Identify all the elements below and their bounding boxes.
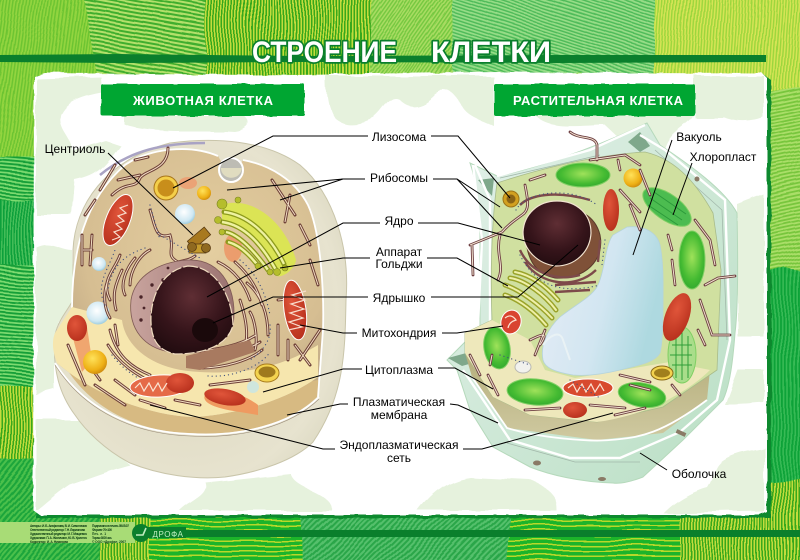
labels: [45, 130, 757, 481]
labels: Ядро: [384, 214, 414, 228]
mitochondria: [67, 190, 310, 415]
Golgi apparatus: [505, 272, 558, 325]
labels: Гольджи: [375, 257, 423, 271]
endoplasmic reticulum: [68, 148, 320, 408]
lysosome: [154, 176, 178, 200]
rough ER cut in front of nucleus: [186, 340, 255, 370]
publisher logo: ДРОФА: [152, 530, 184, 539]
labels: Аппарат: [376, 245, 423, 259]
plant cell illustration: [447, 123, 738, 483]
labels: Вакуоль: [676, 130, 722, 144]
heading: animal cell: ЖИВОТНАЯ КЛЕТКА: [132, 93, 274, 108]
imprint box: Ответственный редактор: Г. Н. Ларионова: [30, 528, 85, 532]
vacuole: [542, 227, 663, 375]
labels: Митохондрия: [362, 326, 436, 340]
nucleus interior with nucleolus: [151, 266, 233, 354]
imprint box: Подписано в печать 05.05.07: [92, 524, 129, 528]
animal cell illustration: [53, 140, 347, 478]
wall junction wedges: [448, 132, 650, 366]
red organelles: [563, 189, 697, 418]
cytoplasm: [465, 152, 721, 422]
publisher logo: [132, 524, 186, 542]
imprint box: Формат 70×100: [92, 528, 112, 532]
wall white double lines: [463, 125, 730, 458]
imprint box: [0, 522, 135, 544]
labels: Эндоплазматическая: [340, 438, 458, 452]
leader lines: [108, 136, 692, 470]
heading: animal cell: [101, 84, 305, 116]
dome of cytoplasm: [70, 149, 323, 400]
endoplasmic reticulum: [470, 132, 735, 415]
yellow bodies and lysosomes: [503, 168, 673, 380]
labels: Хлоропласт: [690, 150, 757, 164]
plasma membrane line: [72, 149, 323, 397]
title: КЛЕТКИ: [431, 36, 551, 69]
nuclear envelope: [131, 260, 234, 353]
labels: Цитоплазма: [365, 363, 433, 377]
imprint box: Художественный редактор: М. Г. Мицкевич: [30, 532, 87, 536]
cut surface: [53, 307, 318, 417]
labels: Центриоль: [45, 142, 105, 156]
lower cut wall: [55, 345, 319, 433]
wall pores: [533, 176, 700, 481]
labels: Рибосомы: [370, 171, 428, 185]
bottom divider band: [150, 530, 800, 537]
heading: plant cell: РАСТИТЕЛЬНАЯ КЛЕТКА: [513, 93, 684, 108]
labels: мембрана: [371, 408, 428, 422]
imprint box: Авторы: И. Б. Агафонова, В. И. Сивоглазов: [30, 524, 87, 528]
nuclear envelope and nucleus: [500, 193, 605, 398]
panel: white sheet: [33, 72, 771, 518]
imprint box: © ООО «Дрофа», 2007: [92, 540, 126, 544]
title: [252, 36, 551, 69]
organelles: small vesicles: [86, 177, 242, 324]
chloroplasts: [481, 163, 705, 411]
cut surface: [465, 320, 710, 422]
lower cut wall: [465, 353, 710, 440]
ribosome dots: [101, 205, 270, 388]
labels: Оболочка: [672, 467, 727, 481]
imprint box: Корректор: И. А. Никанова: [30, 540, 68, 544]
heading: plant cell: [494, 84, 695, 116]
labels: Лизосома: [372, 130, 426, 144]
centriole: [187, 227, 211, 253]
mitochondria: [498, 308, 613, 397]
endocytic vesicle: [219, 158, 243, 182]
labels: сеть: [387, 451, 411, 465]
labels: Ядрышко: [373, 291, 426, 305]
Golgi apparatus: [214, 197, 296, 276]
outer cell body: [54, 140, 347, 478]
imprint box: Печ. л. 1: [92, 532, 106, 536]
cut organelles: [83, 350, 279, 393]
imprint box: Художники: П. А. Жиличкин, Ю. В. Христич: [30, 536, 87, 540]
title: СТРОЕНИЕ: [252, 36, 397, 69]
imprint box: Тираж 3000 экз.: [92, 536, 112, 540]
title divider band: [0, 54, 766, 63]
cell wall: [447, 123, 738, 483]
labels: Плазматическая: [353, 395, 445, 409]
